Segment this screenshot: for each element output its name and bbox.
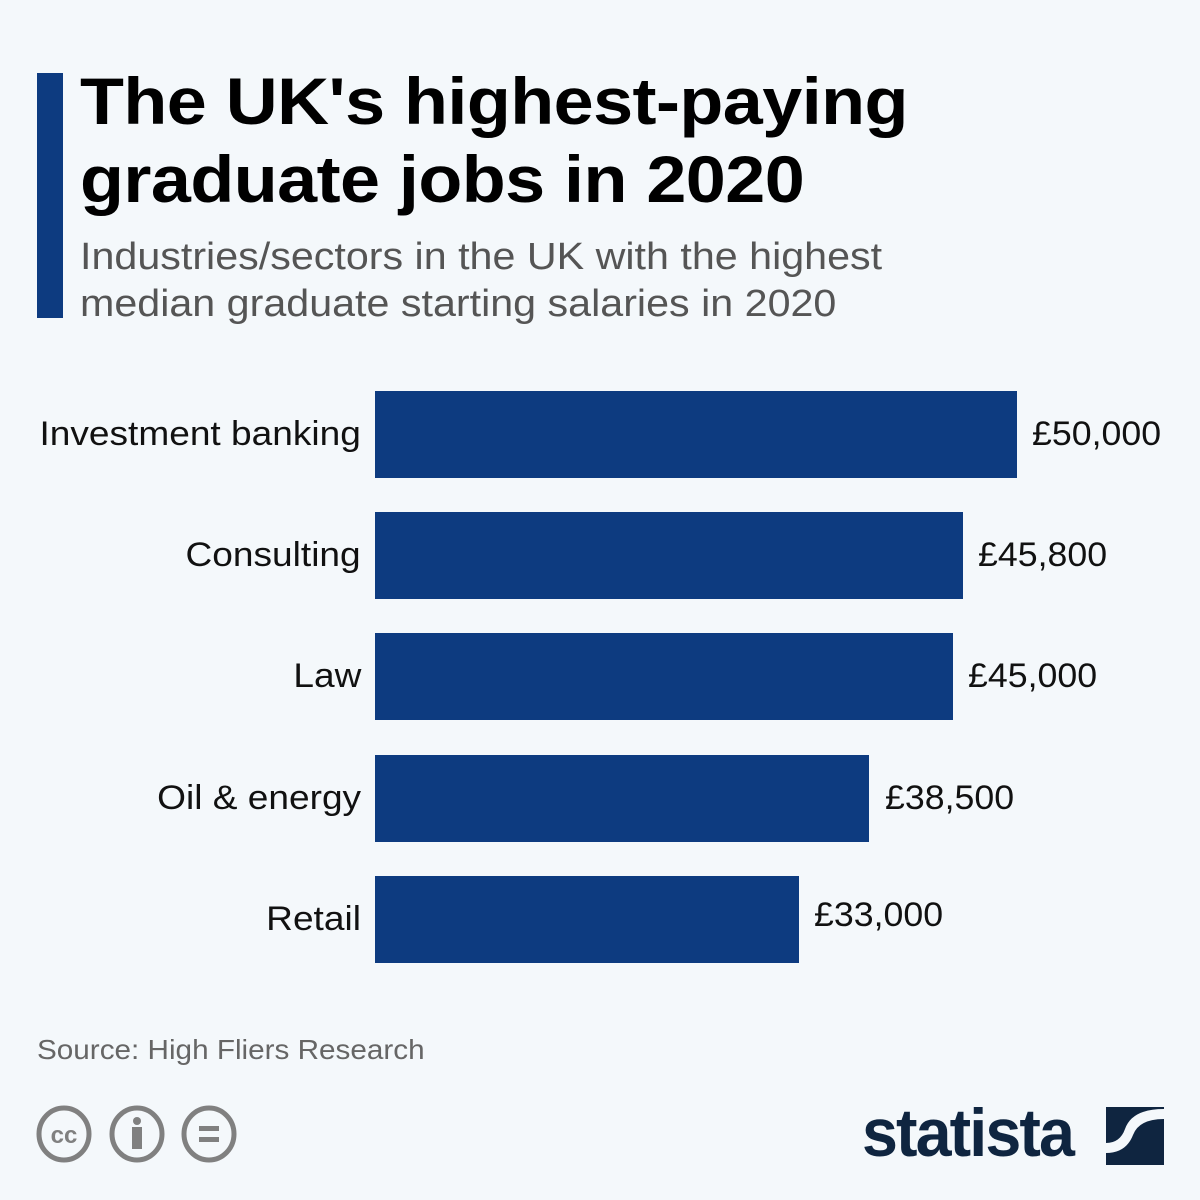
row: Oil & energy: £38,500 <box>885 779 1014 817</box>
statista logo: statista <box>862 1095 1073 1171</box>
row: Investment banking: £50,000 <box>1032 415 1161 453</box>
subtitle: Industries/sectors in the UK with the highest <box>80 236 882 278</box>
icons: creative commons <box>36 1106 236 1162</box>
icons: creative commons: cc <box>51 1122 77 1149</box>
row: Retail: Retail <box>266 900 361 938</box>
title accent bar <box>37 73 63 318</box>
subtitle: median graduate starting salaries in 2020 <box>80 283 836 325</box>
row: Oil & energy: Oil & energy <box>157 779 361 817</box>
row: Law: Law <box>293 657 361 695</box>
row: Consulting <box>186 512 1107 599</box>
subtitle <box>80 236 882 325</box>
row: Retail: £33,000 <box>814 896 943 934</box>
row: Law <box>293 633 1097 720</box>
row: Oil & energy <box>157 755 1014 842</box>
row: Retail <box>266 876 943 963</box>
row: Investment banking <box>40 391 1161 478</box>
statista logo <box>862 1095 1164 1171</box>
title <box>80 64 908 216</box>
row: Consulting: Consulting <box>186 536 361 574</box>
row: Investment banking: Investment banking <box>40 415 361 453</box>
bar chart <box>40 391 1161 963</box>
row: Consulting: £45,800 <box>978 536 1107 574</box>
title: graduate jobs in 2020 <box>80 142 804 216</box>
source: Source: High Fliers Research <box>37 1034 425 1065</box>
row: Law: £45,000 <box>968 657 1097 695</box>
title: The UK's highest-paying <box>80 64 908 138</box>
